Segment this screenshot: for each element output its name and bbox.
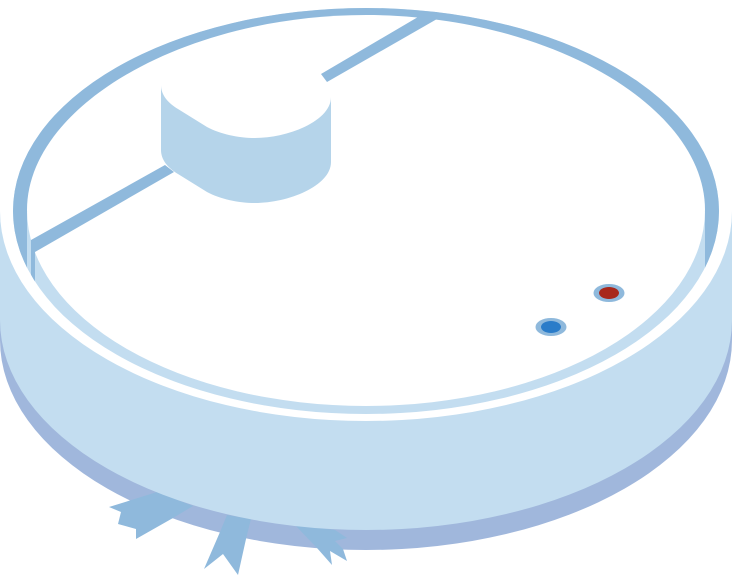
blue upper ring (13, 8, 719, 268)
lid groove left (31, 165, 174, 252)
top surface outer white rim (0, 1, 732, 421)
body side wall (0, 110, 732, 530)
light lower ring (13, 8, 719, 414)
indicator light: red (594, 284, 624, 302)
turret side (161, 85, 331, 203)
icon: middle brush (204, 515, 251, 575)
sensor turret (161, 85, 331, 203)
icon: left brush (109, 492, 193, 539)
lid groove right (321, 12, 437, 82)
top surface inner plate (27, 15, 705, 406)
indicator light: blue (536, 318, 566, 336)
icon: right brush (295, 525, 347, 565)
left seam strip (31, 240, 35, 285)
base shadow band (0, 130, 732, 550)
